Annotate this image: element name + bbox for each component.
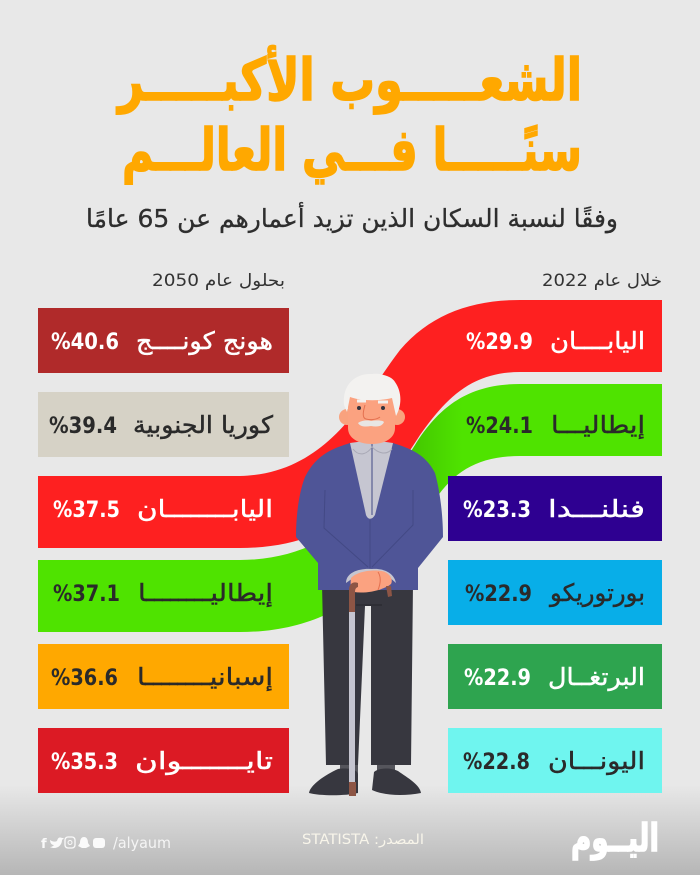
- footer: social icons: [41, 837, 105, 852]
- row left: Hong Kong: هونج كونــــج: [136, 327, 273, 355]
- row left: South Korea: كوريا الجنوبية: [133, 411, 274, 439]
- row left: Taiwan: [38, 728, 289, 793]
- row right: Portugal: [448, 644, 662, 709]
- row left: Hong Kong: %40.6: [51, 330, 119, 355]
- row left: Italy: %37.1: [53, 582, 120, 607]
- row right: Italy: %24.1: [466, 414, 533, 439]
- footer: handle: /alyaum: [113, 834, 171, 852]
- row right: Finland: %23.3: [463, 498, 531, 523]
- footer: social icons: f: [41, 837, 47, 852]
- row right: Greece: [448, 728, 662, 793]
- row left: Italy: إيطاليــــــــا: [138, 579, 273, 608]
- footer: source: المصدر: STATISTA: [302, 832, 424, 848]
- row left: Japan: %37.5: [53, 498, 120, 523]
- row right: Japan: [466, 327, 645, 355]
- row right: Italy: [466, 411, 645, 440]
- row left: Spain: [38, 644, 289, 709]
- title: [116, 45, 582, 184]
- row right: Japan: %29.9: [466, 330, 533, 355]
- row right: Finland: فنلنـــدا: [548, 495, 645, 523]
- ribbon: Italy: [38, 384, 662, 632]
- row right: Portugal: البرتغــال: [548, 663, 645, 691]
- subtitle: وفقًا لنسبة السكان الذين تزيد أعمارهم عن 65 عامًا: [86, 201, 618, 234]
- row left: Spain: %36.6: [51, 666, 118, 691]
- row left: Taiwan: تايـــــــوان: [135, 747, 273, 775]
- row left: Italy: [53, 579, 273, 608]
- row right: Puerto Rico: [448, 560, 662, 625]
- row left: South Korea: [38, 392, 289, 457]
- row right: Puerto Rico: بورتوريكو: [549, 579, 645, 607]
- row left: South Korea: %39.4: [49, 414, 117, 439]
- row left: Taiwan: %35.3: [51, 750, 118, 775]
- column heading: 2022: خلال عام 2022: [542, 271, 662, 291]
- ribbon: Japan: [38, 300, 662, 548]
- logo: اليــوم: [571, 816, 659, 861]
- row left: Spain: إسبانيــــــــا: [137, 663, 273, 692]
- row right: Japan: اليابــــان: [550, 327, 645, 355]
- row right: Finland: [448, 476, 662, 541]
- row right: Puerto Rico: %22.9: [465, 582, 532, 607]
- row right: Greece: %22.8: [463, 750, 530, 775]
- row right: Greece: اليونـــان: [548, 747, 645, 775]
- row left: Japan: اليابــــــــان: [137, 495, 273, 523]
- row left: Japan: [53, 495, 273, 523]
- row right: Portugal: %22.9: [464, 666, 531, 691]
- row right: Italy: إيطاليـــا: [551, 411, 645, 440]
- illustration: elderly man with cane: [296, 374, 443, 796]
- row left: Hong Kong: [38, 308, 289, 373]
- column heading: 2050: بحلول عام 2050: [152, 271, 285, 291]
